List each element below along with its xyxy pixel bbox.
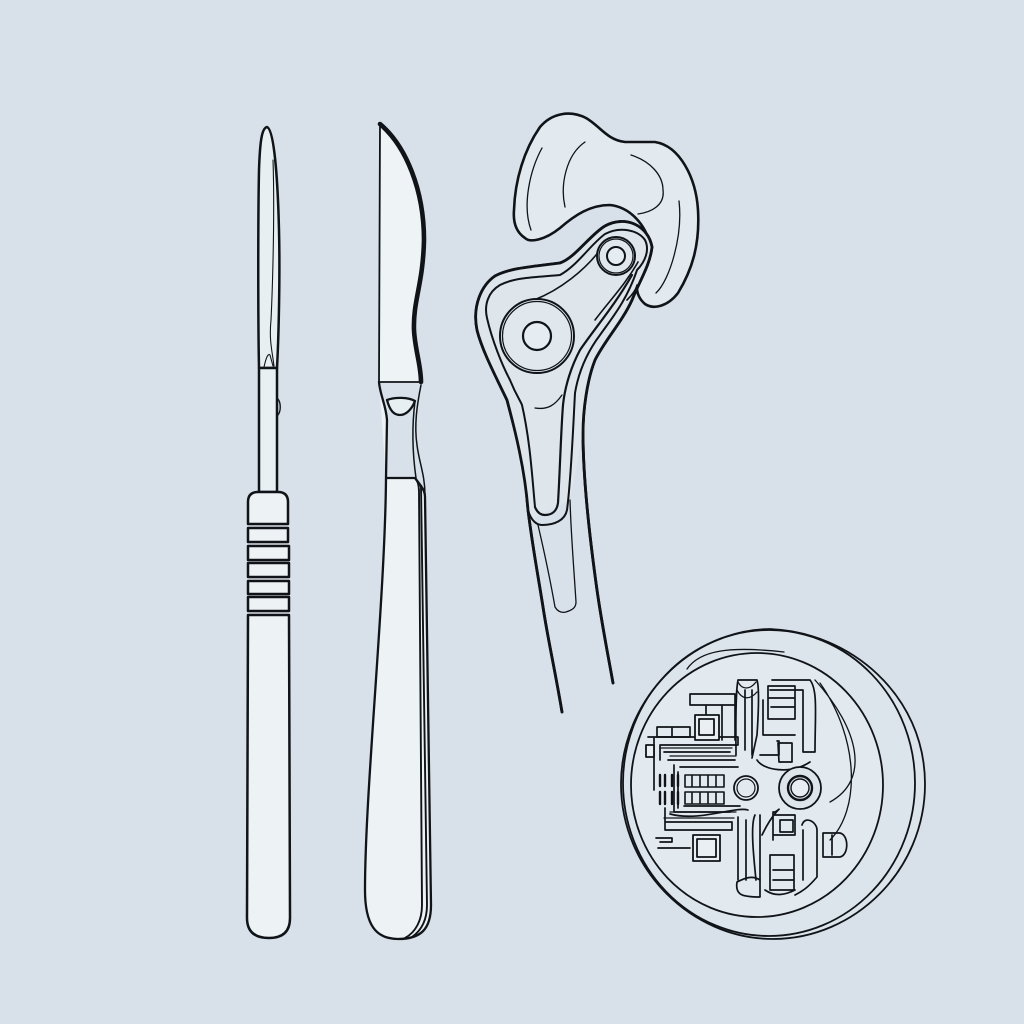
disc outer rings — [621, 629, 925, 939]
scalpel blade — [379, 124, 424, 382]
icon: circuit disc — [621, 629, 925, 939]
scalpel handle lines — [405, 478, 427, 938]
icon: probe instrument — [247, 127, 290, 938]
probe grip bands — [248, 492, 289, 611]
joint inner contour — [486, 230, 647, 525]
joint large pivot — [500, 299, 574, 373]
joint upper head — [514, 114, 698, 307]
memory pads — [660, 775, 724, 804]
circuit traces — [648, 680, 847, 897]
circuit pivots — [734, 776, 758, 800]
probe shaft — [259, 368, 277, 492]
chip squares — [646, 715, 720, 861]
icon: scalpel — [365, 124, 431, 939]
scalpel collar — [365, 382, 431, 939]
probe tip — [258, 127, 279, 368]
icon: joint bone — [476, 114, 698, 712]
probe handle — [247, 615, 290, 938]
joint lower bone outer — [476, 222, 652, 712]
joint small pivot — [597, 237, 635, 275]
